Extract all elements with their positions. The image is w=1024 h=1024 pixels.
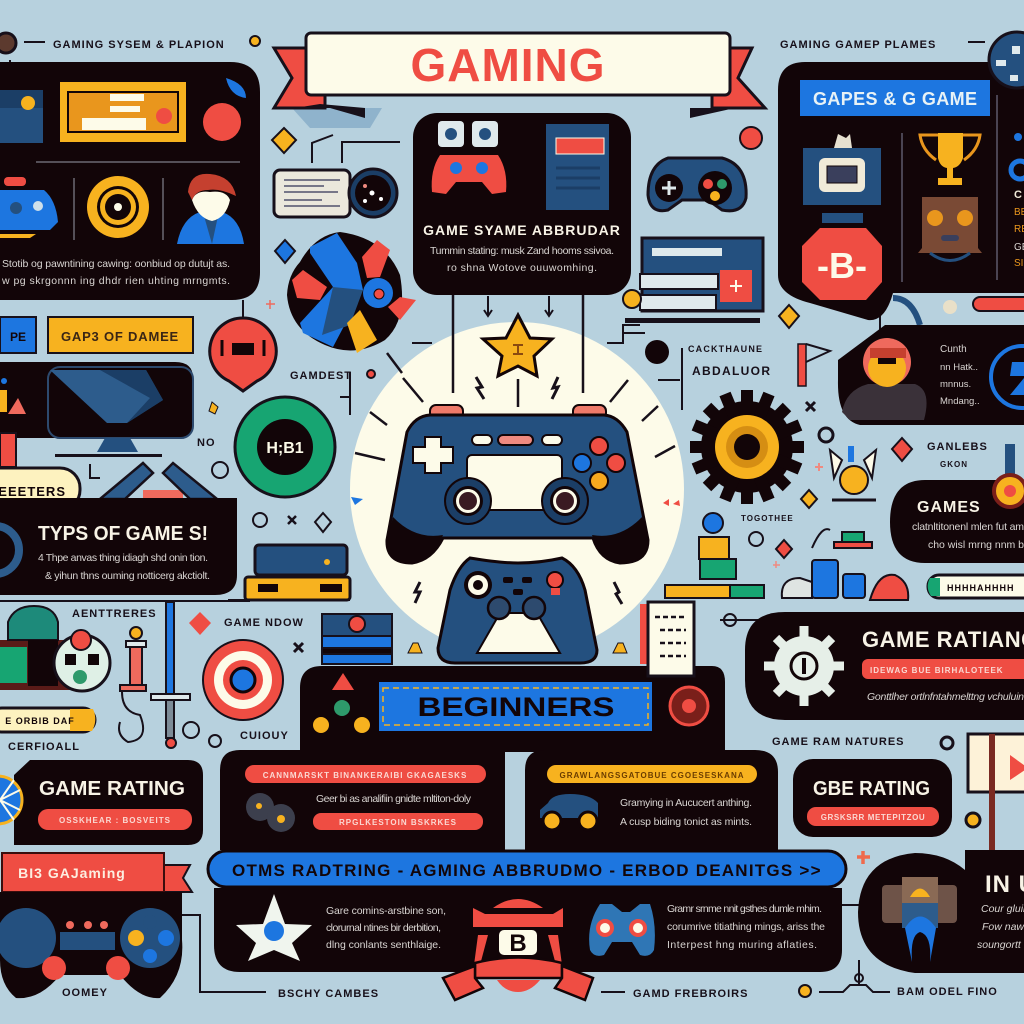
icon: shield target — [203, 640, 283, 720]
small ornaments — [724, 614, 953, 749]
top-left heading label: GAMING SYSEM & PLAPION — [53, 39, 225, 51]
label buttons row left: GAP3 OF DAMEE — [61, 329, 179, 344]
labels right: GANLEBS — [927, 441, 988, 453]
decorative sparkles top-left — [266, 128, 296, 309]
icon: yellow target ring — [87, 176, 149, 238]
monitor stand — [97, 438, 138, 452]
description: Mndang.. — [940, 396, 980, 407]
icon: red B badge: -B- — [817, 245, 867, 286]
panel: top-left gaming system — [0, 62, 260, 300]
icon: joystick — [994, 444, 1024, 507]
pill: progress — [928, 575, 1024, 598]
red subtitle: RPGLKESTOIN BSKRKES — [339, 818, 457, 827]
icon: blue stacked console — [322, 614, 392, 664]
panel heading: TYPS OF GAME S! — [38, 523, 208, 545]
panel heading: GAME RATING — [39, 778, 185, 800]
small direction markers — [351, 497, 680, 653]
red subtitle — [862, 659, 1024, 679]
small labels left middle: NO — [197, 437, 216, 449]
icon: apple — [203, 78, 246, 141]
title text: GAMING — [410, 39, 606, 91]
description right: Gramr srnme nnit gsthes dumle mhim. — [667, 903, 822, 915]
action buttons — [573, 437, 625, 490]
description right: Interpest hng muring aflaties. — [667, 939, 817, 951]
red subtitle: GRSKSRR METEPITZOU — [821, 813, 925, 822]
connector line — [182, 915, 266, 992]
panel: game rating left — [0, 760, 203, 845]
panel: games right: cho wisl mrng nnm b — [928, 539, 1024, 551]
icon: star — [236, 894, 312, 961]
heading bar — [800, 80, 990, 116]
star blue core — [264, 921, 284, 941]
icon: trophy — [920, 133, 980, 185]
d-pad — [413, 437, 453, 473]
icon: robot — [918, 197, 982, 260]
icon: console box — [803, 134, 881, 223]
icon: B emblem — [473, 899, 563, 965]
red subtitle bar: OSSKHEAR : BOSVEITS — [59, 816, 171, 825]
central cream circle — [350, 322, 684, 656]
decorative loop — [749, 529, 830, 568]
icon: two small screens — [438, 121, 498, 147]
panel description: Tummin stating: musk Zand hooms ssivoa. — [430, 245, 614, 257]
small symbols — [90, 462, 331, 532]
clipped side text: SI — [1014, 258, 1023, 269]
red ribbon: big gaming — [2, 853, 192, 892]
label: oomey: OOMEY — [62, 987, 108, 999]
panel: lower centre left — [220, 750, 505, 850]
heading bar: GAPES & G GAME — [813, 89, 977, 109]
panel: types of games: & yihun thns ouming notticerg akctiolt. — [45, 570, 210, 582]
blue ribbon heading: OTMS RADTRING - AGMING ABBRUDMO - ERBOD DEANITGS >> — [232, 861, 822, 880]
panel: top right games — [778, 62, 1024, 320]
icon: book — [546, 124, 609, 210]
left ribbon — [274, 48, 325, 108]
icon: star above gamepad — [483, 315, 552, 376]
icon: dice pair — [246, 793, 295, 832]
label: gamedest: GAMDEST — [290, 370, 352, 382]
small ornaments middle right — [801, 402, 912, 508]
icon: red B badge — [802, 228, 882, 300]
description — [940, 344, 980, 407]
panel: lower centre right — [525, 750, 778, 850]
label: adventures: AENTTRERES — [72, 608, 157, 620]
icon: gamepad top middle right — [648, 127, 762, 211]
title banner — [274, 33, 765, 128]
top-right heading label: GAMING GAMEP PLAMES — [780, 39, 936, 51]
label buttons row left: PE — [10, 330, 26, 344]
small red dot — [367, 370, 375, 378]
icon: handheld game — [0, 606, 110, 691]
icon: green badge — [235, 397, 335, 497]
middle right labels: ABDALUOR — [692, 364, 771, 378]
icon: console stack — [245, 545, 350, 600]
small labels left middle — [0, 402, 218, 467]
red subtitle: CANNMARSKT BINANKERAIBI GKAGAESKS — [263, 771, 467, 780]
description right — [667, 903, 825, 951]
icon: red round badge — [210, 318, 276, 391]
looped line ornament — [119, 692, 143, 742]
paper icon — [640, 602, 694, 676]
description left — [326, 905, 446, 951]
icon: toy car — [540, 794, 598, 830]
icon: robot wheel — [882, 877, 957, 962]
icon: yellow creature — [830, 446, 876, 500]
icon: yellow game card — [60, 82, 186, 142]
icon: wheel — [0, 776, 22, 824]
clipped side text — [1011, 133, 1024, 269]
description: mnnus. — [940, 379, 971, 390]
red subtitle — [807, 807, 939, 826]
round corner dial top right — [989, 32, 1024, 88]
icon: red gamepad — [432, 155, 506, 194]
icon: flag — [798, 344, 830, 386]
pill: beeeters — [0, 468, 80, 510]
panel: game system center — [413, 113, 631, 295]
description right: corumrive titiathing mings, ariss the — [667, 921, 825, 933]
label: certioall: CERFIOALL — [8, 741, 80, 753]
panel: in use bottom right: Fow naw — [982, 921, 1024, 933]
pill: progress: HHHHAHHHH — [947, 583, 1014, 593]
sparkle and label — [189, 612, 304, 652]
blue heading bar: BEGINNERS — [418, 692, 614, 722]
yellow subtitle — [547, 765, 757, 783]
sparkle and label: GAME NDOW — [224, 617, 304, 629]
panel: games right — [890, 444, 1024, 563]
gap between grips — [477, 613, 560, 653]
description: Geer bi as analifiin gnidte mltiton-doly — [316, 793, 472, 805]
icon: helmet character — [842, 338, 927, 420]
panel heading: GAMES — [917, 499, 981, 516]
icon: blue red gamepad — [589, 904, 655, 956]
description: Gramying in Aucucert anthing. — [620, 797, 752, 809]
red subtitle bar — [38, 809, 192, 830]
label: chiouy: CUIOUY — [240, 730, 289, 742]
icon: console — [0, 90, 43, 143]
description left: Gare comins-arstbine son, — [326, 905, 446, 917]
red ribbon under B emblem — [443, 958, 593, 1000]
panel description: 4 Thpe anvas thing idiagh shd onin tion. — [38, 552, 208, 564]
description left: clorurnal ntines bir derbition, — [326, 922, 441, 934]
icon: coins stack — [782, 532, 908, 600]
middle right labels: CACKTHAUNE — [688, 344, 763, 354]
blue ribbon heading — [208, 851, 846, 887]
centre pills — [472, 435, 562, 445]
description text: Stotib og pawntining cawing: oonbiud op dutujt as. — [2, 258, 230, 270]
label: bam odel fino: BAM ODEL FINO — [897, 986, 998, 998]
icon: note with dial — [274, 169, 397, 217]
label buttons row left — [0, 317, 193, 353]
icon: book stack with badge — [623, 238, 763, 323]
icon: red gear — [670, 687, 708, 725]
labels right: GKON — [940, 460, 968, 469]
top-left heading label — [0, 33, 260, 53]
icon: sword — [151, 602, 190, 748]
icon: blue gamepad — [0, 177, 58, 238]
panel: game rating right — [745, 612, 1024, 720]
pill label left: E ORBIB DAF — [5, 716, 75, 726]
clipped side text: C — [1014, 189, 1022, 201]
panel: in use bottom right — [858, 850, 1024, 973]
panel: gbe rating — [793, 759, 952, 837]
panel: bottom centre — [214, 888, 842, 972]
second centre gamepad — [438, 558, 597, 663]
icon: white gear — [764, 626, 844, 706]
icon: colorful map blob — [287, 232, 416, 353]
heading: GBE RATING — [813, 778, 930, 800]
thumbsticks — [445, 478, 588, 524]
shoulder buttons — [430, 405, 606, 419]
screen — [48, 367, 193, 438]
radiating spark marks — [355, 295, 675, 604]
panel title: GAME SYAME ABBRUDAR — [423, 222, 621, 238]
icon: game piece stack left — [665, 513, 764, 598]
description: nn Hatk.. — [940, 362, 978, 373]
middle right labels — [645, 340, 771, 378]
robot arms icon — [100, 463, 217, 500]
flask icon — [893, 298, 957, 325]
red subtitle — [245, 765, 486, 783]
description left: dlng conlants senthlaige. — [326, 939, 441, 951]
icon: large gamepad bottom-left — [0, 892, 182, 998]
description: clatnltitonenl mlen fut am — [912, 521, 1024, 533]
red pill bar — [973, 297, 1024, 311]
arrows into circle — [484, 296, 553, 316]
label: together: TOGOTHEE — [741, 514, 794, 523]
icons: shape buttons — [313, 673, 370, 733]
panel: top-left gaming system: w pg skrgonnn ing dhdr rien uhting mrngmts. — [1, 275, 230, 287]
label: gamd frebroirs: GAMD FREBROIRS — [633, 988, 748, 1000]
banner shadow — [292, 108, 382, 128]
labels right — [927, 441, 988, 469]
panel: in use bottom right: soungortt — [977, 939, 1022, 951]
panel: game system center: ro shna Wotove ouuwomhing. — [447, 262, 597, 274]
icon: large black gear — [690, 390, 804, 504]
panel: types of games — [0, 498, 237, 595]
large centre gamepad — [387, 405, 648, 563]
icon: blue wheel — [991, 346, 1024, 408]
blue heading bar — [379, 682, 652, 731]
bottom connector with node — [601, 960, 890, 997]
panel: beginners — [300, 666, 725, 752]
icon: B emblem: B — [509, 930, 527, 957]
red ribbon: big gaming: BI3 GAJaming — [18, 865, 126, 881]
sparkle markers bottom right — [857, 851, 870, 864]
panel: lower centre right: A cusp biding tonict as mints. — [620, 816, 752, 828]
red subtitle: IDEWAG BUE BIRHALOTEEK — [870, 666, 1004, 675]
sparkle — [779, 305, 799, 328]
description: Gonttlher ortlnfntahmelttng vchuluin — [867, 691, 1024, 703]
icon: character — [177, 174, 244, 244]
pill label left — [0, 708, 95, 732]
panel: character card right — [838, 325, 1024, 425]
label: game ram natures: GAME RAM NATURES — [772, 736, 905, 748]
red subtitle — [313, 813, 483, 830]
right ribbon — [712, 48, 765, 108]
yellow subtitle: GRAWLANGSGATOBUE CGOESESKANA — [559, 771, 745, 780]
icon: chess rook — [120, 627, 146, 691]
label: bschy cambes: BSCHY CAMBES — [278, 988, 379, 1000]
screen — [467, 455, 562, 510]
icon: video player — [966, 734, 1024, 854]
description: Cunth — [940, 344, 967, 355]
monitor panel — [0, 362, 193, 457]
ornament circles — [183, 722, 221, 747]
icon: green badge: H;B1 — [266, 440, 304, 457]
